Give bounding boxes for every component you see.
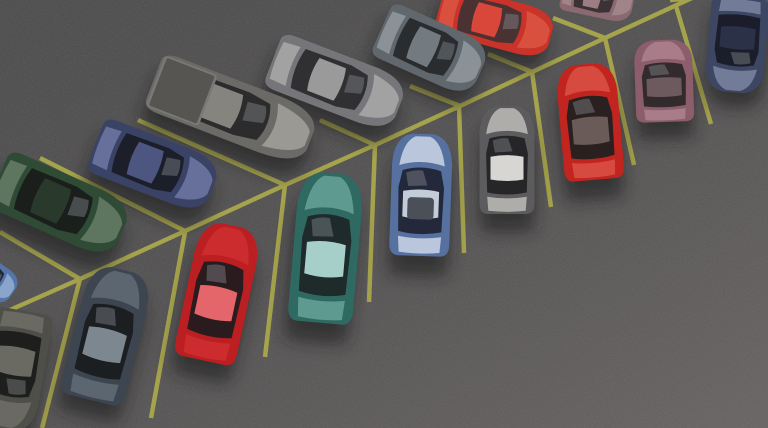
car: dark grey, bottom left [0,306,54,428]
truck bed [147,56,216,125]
car: navy sedan [85,117,223,215]
car: blue, left edge [0,244,23,308]
car: dark slate sedan [59,262,155,408]
car: teal sedan [287,170,365,326]
car: red sedan [173,219,263,367]
car: navy SUV, top right [704,0,768,95]
car: orange-red coupe [433,0,557,61]
car: grey SUV [370,2,492,98]
car: silver sedan [263,32,409,134]
car: grey pickup truck [143,52,321,168]
car: red SUV [555,62,625,182]
engine louvres [407,197,434,220]
car: mauve SUV [634,39,694,123]
car: dark green SUV [0,149,134,261]
car: mauve, top [558,0,638,24]
car: silver-blue sports car [389,133,453,257]
car: white-grey SUV [480,106,534,214]
